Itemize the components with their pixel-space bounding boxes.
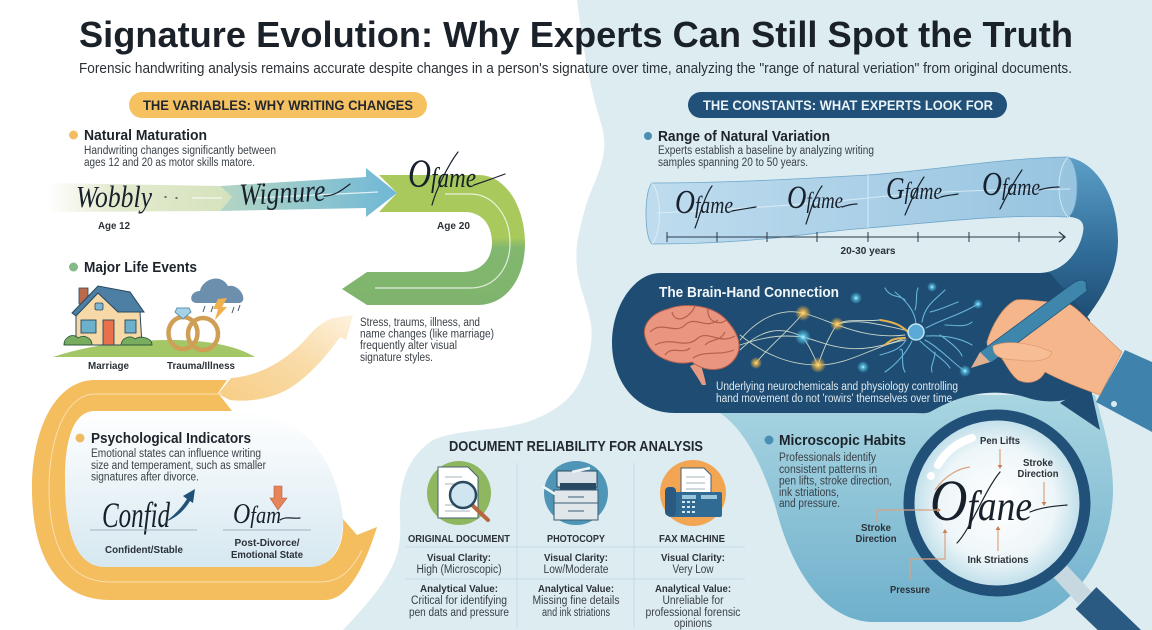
icon: down arrow [270, 486, 287, 510]
label: stroke direction right: Direction [1018, 468, 1058, 480]
orange ribbon [32, 380, 377, 600]
signature: age 20: Ofame [408, 151, 476, 196]
column: photocopy: Visual Clarity: [544, 552, 608, 564]
label: original document: ORIGINAL DOCUMENT [408, 533, 511, 545]
title: Signature Evolution: Why Experts Can Still Spot the Truth [79, 14, 1073, 55]
signature: wignure: Wignure [239, 173, 326, 212]
shirt cuff [1096, 350, 1152, 432]
signature: magnified [930, 468, 1067, 543]
signature: wobbly: Wobbly [76, 179, 152, 214]
icon: brain [644, 305, 739, 385]
column: original: Analytical Value: [420, 583, 498, 595]
column: fax: opinions [674, 618, 712, 630]
label: post-divorce: Post-Divorce/ [234, 537, 300, 549]
panel background [65, 411, 343, 567]
text: microscopic: and pressure. [779, 498, 840, 510]
label: age 20: Age 20 [437, 220, 470, 232]
hand back [987, 300, 1122, 395]
signature: sample 4: Ofame [982, 166, 1040, 203]
ribbon highlights [192, 192, 510, 288]
icon: photocopier [542, 461, 608, 525]
label: photocopy: PHOTOCOPY [547, 533, 605, 545]
table dividers [405, 463, 745, 628]
column: fax: Unreliable for [662, 595, 724, 607]
label: 20-30 years: 20-30 years [840, 245, 896, 257]
heading: range: Range of Natural Variation [658, 128, 830, 145]
column: original: pen dats and pressure [409, 607, 509, 619]
heading: document reliability: DOCUMENT RELIABILITY FOR ANALYSIS [449, 438, 703, 455]
arrow: life events to psychological [218, 315, 353, 401]
text: microscopic [779, 452, 892, 510]
signature: age 20 [408, 151, 505, 205]
column: original: Critical for identifying [411, 595, 507, 607]
icon: wedding rings [168, 308, 218, 350]
icon: house [64, 286, 152, 345]
heading pill: variables [129, 92, 427, 118]
signature: sample 3: Gfame [886, 170, 942, 206]
tube end caps and center line [652, 157, 1070, 244]
pen [971, 280, 1087, 368]
text: life events: Stress, traums, illness, and [360, 317, 480, 329]
signature: sample 1 [675, 184, 756, 228]
text: brain-hand: hand movement do not 'rowirs' themselves over time. [716, 393, 955, 405]
heading: brain-hand: The Brain-Hand Connection [659, 284, 839, 301]
text: brain-hand: Underlying neurochemicals and physiology controlling [716, 381, 958, 393]
bullet: psychological [76, 434, 84, 442]
column: fax: Very Low [672, 564, 714, 576]
column: photocopy: Analytical Value: [538, 583, 614, 595]
text: life events [360, 317, 494, 364]
label: post-divorce: Emotional State [231, 549, 303, 561]
label: ink striations: Ink Striations [968, 554, 1029, 566]
column: photocopy: Low/Moderate [544, 564, 608, 576]
cuff button [1111, 401, 1117, 407]
background: constants side [343, 0, 1152, 630]
column: fax [646, 552, 741, 630]
column: original: High (Microscopic) [416, 564, 502, 576]
label: pressure: Pressure [890, 584, 930, 596]
panel: range of natural variation [644, 128, 1118, 320]
timeline [667, 232, 1065, 242]
bullet: natural maturation [69, 130, 78, 140]
column: photocopy: and ink striations [542, 607, 610, 619]
icon: storm cloud [191, 279, 243, 320]
panel: brain-hand connection [612, 273, 1152, 432]
text: life events: frequently alter visual [360, 340, 457, 352]
label: stroke direction left: Direction [856, 533, 896, 545]
text: psychological: size and temperament, such as smaller [91, 460, 266, 472]
icon: neural network [740, 282, 983, 377]
label: trauma: Trauma/Illness [167, 360, 235, 372]
bullet: microscopic [764, 436, 774, 444]
heading pill: constants [688, 92, 1007, 118]
text: microscopic: ink striations, [779, 487, 839, 499]
label: stroke direction right: Stroke [1023, 457, 1053, 469]
text: natural maturation: Handwriting changes significantly between [84, 145, 276, 157]
heading: psychological: Psychological Indicators [91, 430, 251, 447]
text: microscopic: Professionals identify [779, 452, 876, 464]
heading: life events: Major Life Events [84, 259, 197, 276]
column: fax: professional forensic [646, 607, 741, 619]
tail under hand [1060, 385, 1100, 430]
label: age 12: Age 12 [98, 220, 130, 232]
label: marriage: Marriage [88, 360, 129, 372]
panel: microscopic habits [720, 395, 1135, 630]
panel background [612, 273, 1090, 413]
label: post-divorce [231, 537, 303, 561]
panel: document reliability [405, 438, 745, 630]
text: life events: signature styles. [360, 352, 433, 364]
hill [53, 340, 255, 357]
icon: magnifier handle [1057, 568, 1135, 630]
text: psychological [91, 448, 266, 484]
label: stroke direction right [1018, 457, 1058, 480]
text: brain-hand [716, 381, 958, 405]
label: confident: Confident/Stable [105, 544, 183, 556]
signature: post-divorce [223, 499, 311, 530]
column: original: Visual Clarity: [427, 552, 491, 564]
heading: microscopic: Microscopic Habits [779, 432, 906, 449]
heading pill: variables: THE VARIABLES: WHY WRITING CHANGES [143, 97, 413, 113]
text: range: Experts establish a baseline by analyzing writing [658, 145, 874, 157]
text: psychological: Emotional states can influence writing [91, 448, 261, 460]
signature: confident: Confid [102, 495, 171, 535]
text: microscopic: pen lifts, stroke direction, [779, 476, 892, 488]
text: life events: name changes (like marriage) [360, 328, 494, 340]
icon: fax machine [660, 460, 726, 526]
column: photocopy [532, 552, 620, 619]
bullet: life events [69, 262, 78, 272]
panel: psychological indicators [32, 380, 377, 600]
text: microscopic: consistent patterns in [779, 464, 877, 476]
subtitle: Forensic handwriting analysis remains accurate despite changes in a person's signature over time, analyzing the "range of natural veriation" from original documents. [79, 61, 1072, 77]
callout lines [877, 449, 1046, 580]
icon: magnifier lens [909, 415, 1085, 591]
text: natural maturation [84, 145, 276, 169]
signature: sample 1: Ofame [675, 184, 733, 221]
heading: natural maturation: Natural Maturation [84, 127, 207, 144]
label: stroke direction left [856, 522, 896, 545]
panel background [720, 395, 1113, 622]
icon: original document [427, 461, 491, 525]
text: natural maturation: ages 12 and 20 as motor skills matore. [84, 157, 255, 169]
heading pill: constants: THE CONSTANTS: WHAT EXPERTS LOOK FOR [703, 97, 993, 113]
bullet: range [644, 132, 652, 140]
column: photocopy: Missing fine details [532, 595, 620, 607]
column: original [409, 552, 509, 619]
icon: up arrow [165, 489, 195, 522]
signature: post-divorce: Ofam [233, 499, 281, 530]
icon: hand with pen [971, 280, 1152, 432]
arrow ribbon: green path [342, 175, 525, 305]
label: pen lifts: Pen Lifts [980, 435, 1020, 447]
text: range: samples spanning 20 to 50 years. [658, 157, 808, 169]
label: fax machine: FAX MACHINE [659, 533, 725, 545]
signature: magnified: Ofane [930, 468, 1032, 533]
pen nib [971, 352, 990, 368]
column: fax: Analytical Value: [655, 583, 731, 595]
panel: natural maturation [48, 127, 525, 305]
panel: major life events [53, 259, 494, 372]
arrow ribbon: middle segment [220, 168, 397, 217]
thumb [993, 343, 1052, 361]
ribbon highlight [49, 394, 362, 582]
ribbon: tube to brain panel [1000, 157, 1118, 320]
text: psychological: signatures after divorce. [91, 472, 199, 484]
column: fax: Visual Clarity: [661, 552, 725, 564]
signature: sample 2: Ofame [787, 180, 843, 216]
text: range [658, 145, 874, 169]
label: stroke direction left: Stroke [861, 522, 891, 534]
ribbon: glass tube [646, 157, 1077, 244]
arrow ribbon: age 12 segment [48, 183, 232, 212]
